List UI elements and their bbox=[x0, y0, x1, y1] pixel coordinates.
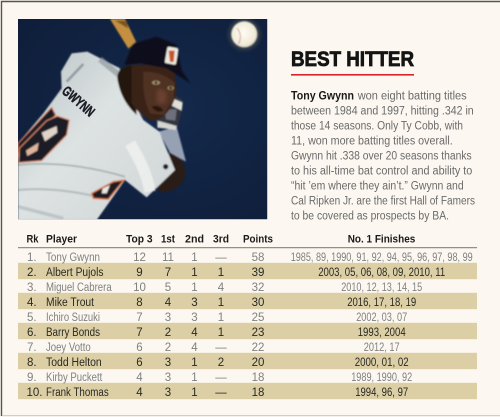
row 8: 20 bbox=[252, 357, 264, 369]
row 9: 18 bbox=[252, 372, 264, 384]
row 6: Barry Bonds bbox=[46, 327, 100, 339]
row 4: 3 bbox=[191, 297, 198, 309]
row 9: — bbox=[215, 372, 227, 384]
row 10: — bbox=[215, 387, 227, 399]
row 3 bbox=[27, 282, 422, 294]
row 9: 4 bbox=[136, 372, 143, 384]
jersey bbox=[18, 52, 175, 220]
jersey number 35 on sleeve bbox=[92, 180, 124, 199]
body text: Tony Gwynn bbox=[291, 90, 354, 102]
row 6: 23 bbox=[252, 327, 264, 339]
jersey number 19 bbox=[18, 107, 56, 154]
row 10: 3 bbox=[165, 387, 171, 399]
row 9: 1 bbox=[191, 372, 198, 384]
body text: those 14 seasons. Only Ty Cobb, with bbox=[291, 120, 463, 132]
table header row: Rk bbox=[26, 233, 39, 245]
photo: Tony Gwynn batting bbox=[18, 19, 267, 220]
wrist sleeve bbox=[159, 127, 186, 162]
row 5: 3 bbox=[165, 312, 171, 324]
row 1: 1 bbox=[191, 252, 198, 264]
row 3: 32 bbox=[252, 282, 264, 294]
bat bbox=[110, 19, 136, 49]
row 7: 2012, 17 bbox=[364, 342, 400, 354]
row 7: Joey Votto bbox=[46, 342, 91, 354]
row 1: — bbox=[215, 252, 227, 264]
row 4: 30 bbox=[252, 297, 264, 309]
cap bbox=[124, 37, 191, 83]
row 5: 25 bbox=[252, 312, 264, 324]
row 8 bbox=[27, 357, 409, 369]
jersey name lettering: GWYNN bbox=[59, 83, 98, 120]
row 5: 1 bbox=[218, 312, 224, 324]
row 5: 3 bbox=[191, 312, 198, 324]
row 5: Ichiro Suzuki bbox=[46, 312, 100, 324]
row 9: 9. bbox=[27, 372, 37, 384]
row 2: 2003, 05, 06, 08, 09, 2010, 11 bbox=[318, 267, 445, 279]
body text: to his all-time bat control and ability to bbox=[291, 165, 472, 177]
row 1: 12 bbox=[133, 252, 146, 264]
row 10: 10. bbox=[26, 387, 42, 399]
row 5 bbox=[27, 312, 407, 324]
row 9: Kirby Puckett bbox=[46, 372, 103, 384]
row 4: 2016, 17, 18, 19 bbox=[347, 297, 416, 309]
table: top ten hitters bbox=[18, 233, 477, 399]
row 6: 7 bbox=[136, 327, 143, 339]
row 4: 1 bbox=[218, 297, 224, 309]
row 2: 39 bbox=[252, 267, 264, 279]
row 2: 2. bbox=[27, 267, 37, 279]
row 8: 2000, 01, 02 bbox=[355, 357, 409, 369]
table header row: No. 1 Finishes bbox=[348, 233, 415, 245]
row 2: Albert Pujols bbox=[46, 267, 104, 279]
row 5: 5. bbox=[27, 312, 37, 324]
row 2: 1 bbox=[218, 267, 224, 279]
row 1: 1. bbox=[27, 252, 37, 264]
row 10: 1 bbox=[191, 387, 198, 399]
ball glow bbox=[229, 19, 260, 50]
table header row: Player bbox=[46, 233, 78, 245]
forearm bbox=[147, 152, 185, 192]
body text: “hit ’em where they ain’t.” Gwynn and bbox=[291, 180, 464, 192]
row 3: 10 bbox=[133, 282, 146, 294]
row 3: 1 bbox=[191, 282, 198, 294]
row 1 bbox=[27, 252, 473, 264]
table header row: 1st bbox=[161, 233, 175, 245]
heading: BEST HITTER bbox=[291, 48, 414, 71]
row 10: 4 bbox=[136, 387, 143, 399]
row 8: 6 bbox=[136, 357, 143, 369]
row 4: 4. bbox=[27, 297, 37, 309]
row 5: 2002, 03, 07 bbox=[356, 312, 407, 324]
row 3: 4 bbox=[218, 282, 225, 294]
row 10: 1994, 96, 97 bbox=[355, 387, 408, 399]
row 7 bbox=[27, 342, 400, 354]
table header row bbox=[26, 233, 415, 245]
row 3: Miguel Cabrera bbox=[46, 282, 112, 294]
row 6: 6. bbox=[27, 327, 37, 339]
sleeve logo bbox=[163, 164, 168, 169]
row 2: 1 bbox=[191, 267, 198, 279]
row 7: 22 bbox=[252, 342, 264, 354]
row 4: 8 bbox=[136, 297, 143, 309]
row 8: 8. bbox=[27, 357, 37, 369]
row 3: 3. bbox=[27, 282, 37, 294]
glove bbox=[157, 93, 183, 128]
row 6: 2 bbox=[165, 327, 171, 339]
row 6: 4 bbox=[191, 327, 198, 339]
row 3: 5 bbox=[165, 282, 171, 294]
row 2 bbox=[27, 267, 445, 279]
row 4: 4 bbox=[165, 297, 172, 309]
row 2: 7 bbox=[165, 267, 171, 279]
row 1: 11 bbox=[162, 252, 174, 264]
row 7: 7. bbox=[27, 342, 37, 354]
row 8: Todd Helton bbox=[46, 357, 102, 369]
body text: 11, won more batting titles overall. bbox=[291, 135, 453, 147]
body text: won eight batting titles bbox=[357, 90, 467, 102]
row 8: 3 bbox=[165, 357, 171, 369]
row 7: 4 bbox=[191, 342, 198, 354]
row 9: 3 bbox=[165, 372, 171, 384]
row 10 bbox=[26, 387, 408, 399]
row 7: 2 bbox=[165, 342, 171, 354]
row 9 bbox=[27, 372, 412, 384]
table header row: Points bbox=[243, 233, 273, 245]
body text: to be covered as prospects by BA. bbox=[291, 210, 449, 222]
table header row: 2nd bbox=[185, 233, 204, 245]
neck and head bbox=[117, 65, 137, 115]
table header row: 3rd bbox=[213, 233, 229, 245]
row 2: 9 bbox=[136, 267, 143, 279]
row 4: Mike Trout bbox=[46, 297, 95, 309]
table header row: Top 3 bbox=[126, 233, 152, 245]
row 6: 1 bbox=[218, 327, 224, 339]
row 1: Tony Gwynn bbox=[46, 252, 100, 264]
row 6: 1993, 2004 bbox=[358, 327, 406, 339]
body text: Cal Ripken Jr. are the first Hall of Famers bbox=[291, 195, 475, 207]
row 7: — bbox=[215, 342, 227, 354]
row 3: 2010, 12, 13, 14, 15 bbox=[341, 282, 422, 294]
row 1: 58 bbox=[252, 252, 264, 264]
row 8: 2 bbox=[218, 357, 224, 369]
row 10: Frank Thomas bbox=[46, 387, 109, 399]
row 8: 1 bbox=[191, 357, 198, 369]
row 10: 18 bbox=[252, 387, 264, 399]
row 4 bbox=[27, 297, 416, 309]
body text: between 1984 and 1997, hitting .342 in bbox=[291, 105, 474, 117]
heading rule bbox=[291, 74, 414, 76]
body text: Gwynn hit .338 over 20 seasons thanks bbox=[291, 150, 472, 162]
row shading bands bbox=[18, 263, 477, 399]
row 5: 7 bbox=[136, 312, 143, 324]
body text bbox=[291, 90, 475, 222]
row 6 bbox=[27, 327, 406, 339]
row 9: 1989, 1990, 92 bbox=[351, 372, 412, 384]
row 7: 6 bbox=[136, 342, 143, 354]
